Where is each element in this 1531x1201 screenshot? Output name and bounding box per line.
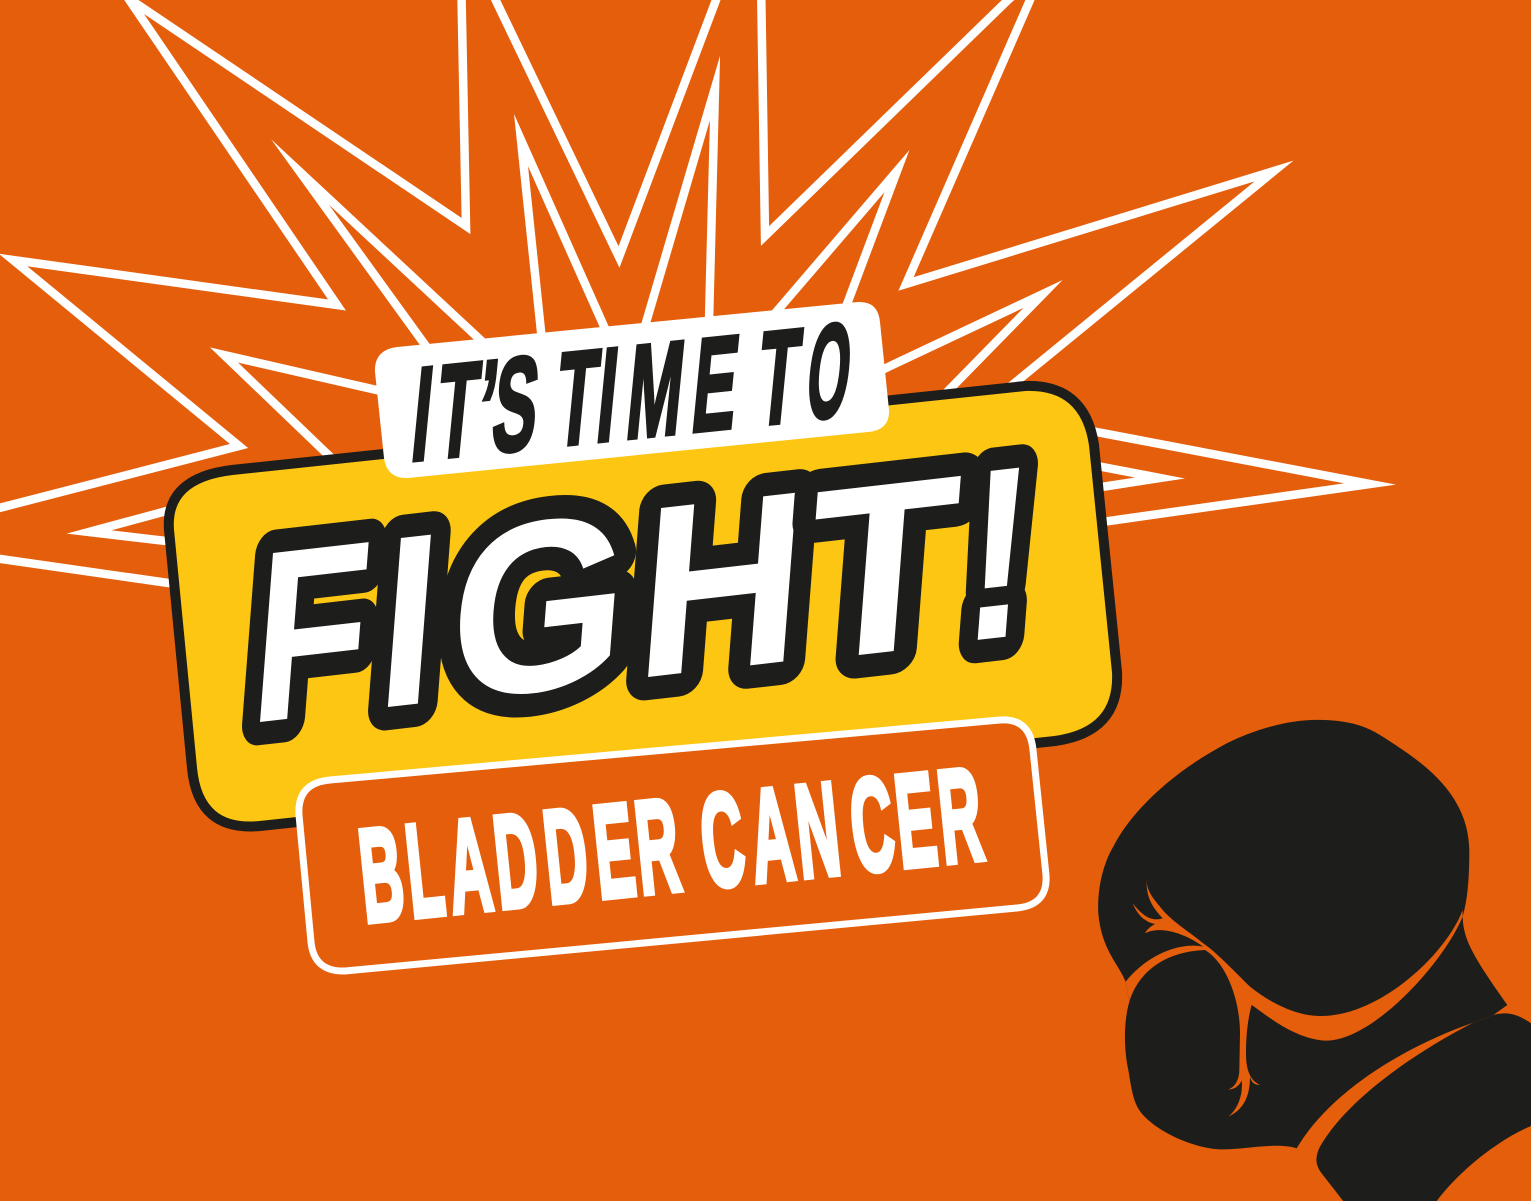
heading: fight — [243, 413, 1042, 776]
panel: yellow fight banner — [169, 386, 1117, 827]
heading: fight: G — [441, 459, 639, 754]
panel: white label — [375, 302, 889, 478]
panel: orange bladder cancer box — [299, 720, 1046, 971]
starburst: inner outline — [89, 88, 1160, 545]
heading: fight: I — [370, 481, 449, 761]
starburst: outer outline — [0, 0, 1370, 589]
heading: fight: F — [243, 488, 380, 776]
heading: it's time to: O — [801, 294, 858, 448]
heading: fight: ! — [955, 413, 1042, 695]
heading: fight: H — [629, 438, 816, 731]
heading: it's time to: IT’S TIME T — [406, 301, 807, 490]
icon: boxing glove — [1098, 720, 1531, 1201]
heading: fight: T — [798, 423, 967, 715]
heading: bladder cancer: BLADDER CANCER — [353, 740, 989, 950]
